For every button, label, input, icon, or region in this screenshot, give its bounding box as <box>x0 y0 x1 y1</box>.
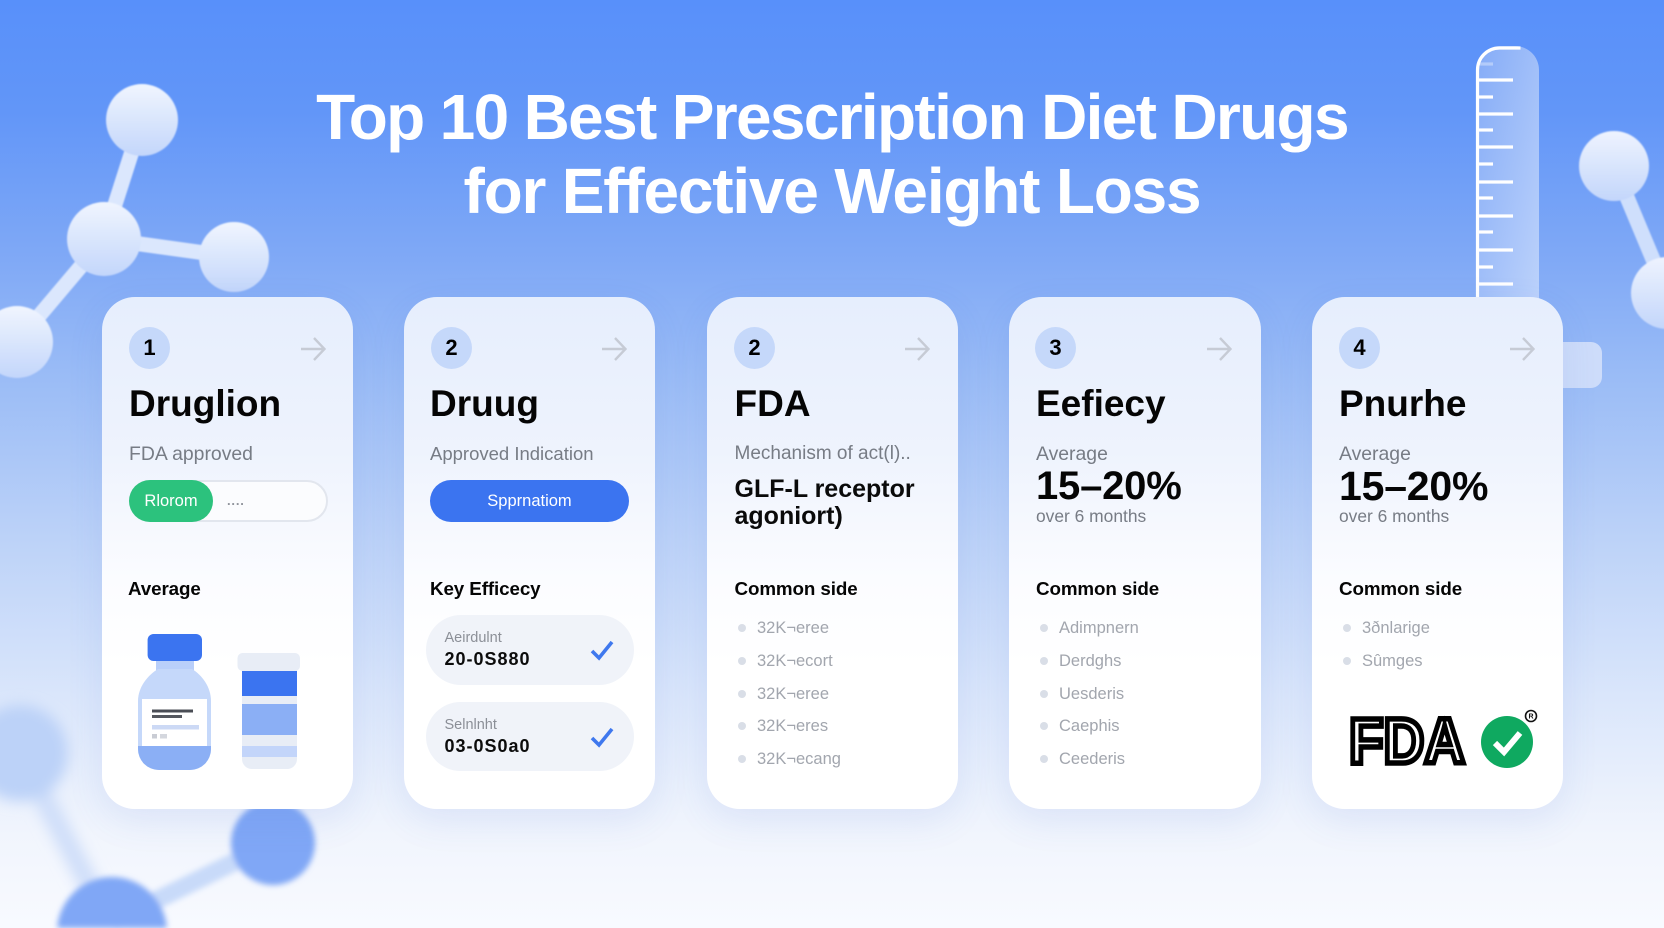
background molecule: blurred lower left <box>0 701 319 928</box>
card 1 toggle pill <box>129 480 328 522</box>
card 4 section label: Common side <box>1036 578 1159 598</box>
card 2 number badge: 2 <box>445 335 458 360</box>
panel: card 2 <box>404 297 655 809</box>
card 1 section label: Average <box>128 578 201 598</box>
card 3 number badge: 2 <box>748 335 761 360</box>
icon: green check seal: R <box>1528 714 1534 720</box>
title <box>316 81 1348 227</box>
card 5 number badge <box>1339 327 1380 369</box>
card 5 section label: Common side <box>1339 578 1462 598</box>
card 1 subtitle: FDA approved <box>129 443 253 465</box>
card 3 side effects list: 32K¬eres <box>757 717 828 735</box>
card 4 duration: over 6 months <box>1036 506 1146 526</box>
card 3 number badge <box>734 327 775 369</box>
card 4 side effects list <box>1040 619 1139 768</box>
row one check <box>590 640 614 661</box>
card 5 subtitle: Average <box>1339 443 1411 465</box>
background molecule: upper left <box>0 83 270 378</box>
panel: card 3 <box>707 297 958 809</box>
card 4 number badge <box>1035 327 1076 369</box>
row two check <box>590 728 614 748</box>
card 1 arrow <box>301 337 326 361</box>
card 1 number badge <box>129 327 170 369</box>
card 4 subtitle: Average <box>1036 443 1108 465</box>
card 2 blue pill: Spprnatiom <box>487 492 572 510</box>
card 2 blue pill <box>430 480 629 522</box>
card 2 number badge <box>431 327 472 369</box>
card 3 subtitle: Mechanism of act(l).. <box>734 443 911 464</box>
card 5 efficacy number: 15–20% <box>1339 463 1488 509</box>
background measuring ruler <box>1476 46 1602 388</box>
card 4 efficacy number: 15–20% <box>1036 464 1182 508</box>
card 3 section label: Common side <box>734 578 858 598</box>
card 3 arrow <box>905 337 930 361</box>
card 3 mechanism: agoniort) <box>734 502 843 530</box>
card 3 side effects list: 32K¬ecort <box>757 652 833 670</box>
card 2 arrow <box>602 337 627 361</box>
icon: medicine bottle and jar <box>138 634 300 770</box>
card 4 side effects list: Adimpnern <box>1059 619 1139 637</box>
panel: card 5 <box>1312 297 1563 809</box>
card 3 side effects list <box>738 619 841 768</box>
card 4 side effects list: Derdghs <box>1059 652 1121 670</box>
title: for Effective Weight Loss <box>464 155 1200 227</box>
row two value: 03-0S0a0 <box>444 736 531 756</box>
card 5 heading: Pnurhe <box>1339 383 1466 424</box>
card 3 side effects list: 32K¬eree <box>757 619 829 637</box>
card 5 side effects list <box>1343 619 1430 670</box>
icon: bottle <box>138 634 211 770</box>
card 4 number badge: 3 <box>1049 335 1062 360</box>
icon: green check seal <box>1481 710 1538 768</box>
card 5 duration: over 6 months <box>1339 506 1449 526</box>
card 3 heading: FDA <box>734 383 811 424</box>
card 5 side effects list: 3ðnlarige <box>1362 619 1430 637</box>
card 5 number badge: 4 <box>1353 335 1366 360</box>
panel: card 1 <box>102 297 353 809</box>
icon: jar <box>238 653 300 769</box>
card 3 side effects list: 32K¬ecang <box>757 750 841 768</box>
card 4 side effects list: Caephis <box>1059 717 1120 735</box>
row two label: Selnlnht <box>444 717 497 733</box>
card 3 side effects list: 32K¬eree <box>757 685 829 703</box>
row one label: Aeirdulnt <box>444 630 502 646</box>
row one value: 20-0S880 <box>444 649 531 669</box>
card 2 row one <box>426 615 634 685</box>
background molecule: upper right <box>1578 130 1664 330</box>
panel: card 4 <box>1009 297 1261 809</box>
card 1 number badge: 1 <box>143 335 156 360</box>
card 4 side effects list: Ceederis <box>1059 750 1125 768</box>
card 2 section label: Key Efficecy <box>430 578 541 598</box>
card 2 subtitle: Approved Indication <box>430 443 594 464</box>
card 4 heading: Eefiecy <box>1036 383 1166 424</box>
card 2 row two <box>426 702 634 771</box>
card 4 side effects list: Uesderis <box>1059 685 1124 703</box>
card 3 mechanism <box>734 475 915 530</box>
card 1 heading: Druglion <box>129 383 281 424</box>
card 5 arrow <box>1510 337 1535 361</box>
card 1 green toggle label <box>129 480 213 522</box>
card 2 heading: Druug <box>430 383 539 424</box>
card 1 green toggle label: Rlorom <box>144 492 198 510</box>
card 3 mechanism: GLF-L receptor <box>734 475 915 503</box>
title: Top 10 Best Prescription Diet Drugs <box>316 81 1348 153</box>
card 4 arrow <box>1207 337 1232 361</box>
card 5 side effects list: Sûmges <box>1362 652 1423 670</box>
card 1 toggle dots: .... <box>227 493 245 508</box>
